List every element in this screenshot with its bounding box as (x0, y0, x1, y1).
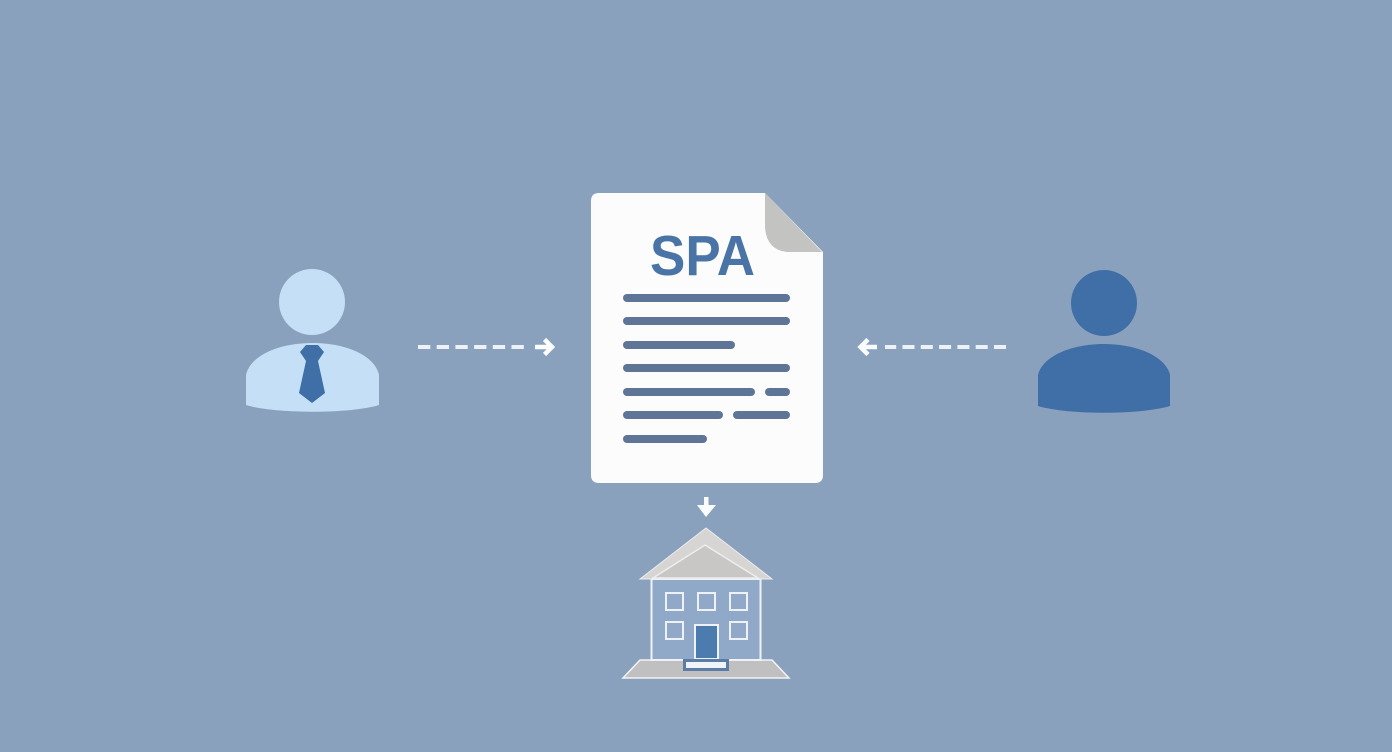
icon: property building (623, 528, 789, 678)
windows (666, 593, 747, 639)
base (623, 660, 789, 678)
roof (640, 528, 772, 579)
title: SPA: SPA (650, 224, 755, 288)
text lines (623, 294, 790, 443)
arrow: SPA to property (697, 497, 716, 517)
walls (652, 579, 760, 660)
icon: buyer person (1038, 270, 1170, 413)
icon: folded corner (765, 193, 822, 252)
panel: SPA document (591, 193, 823, 483)
icon: seller person with tie (246, 269, 379, 412)
door (695, 625, 718, 659)
step (684, 660, 728, 670)
arrow: seller to SPA (418, 340, 552, 354)
arrow: buyer to SPA (860, 340, 1006, 354)
